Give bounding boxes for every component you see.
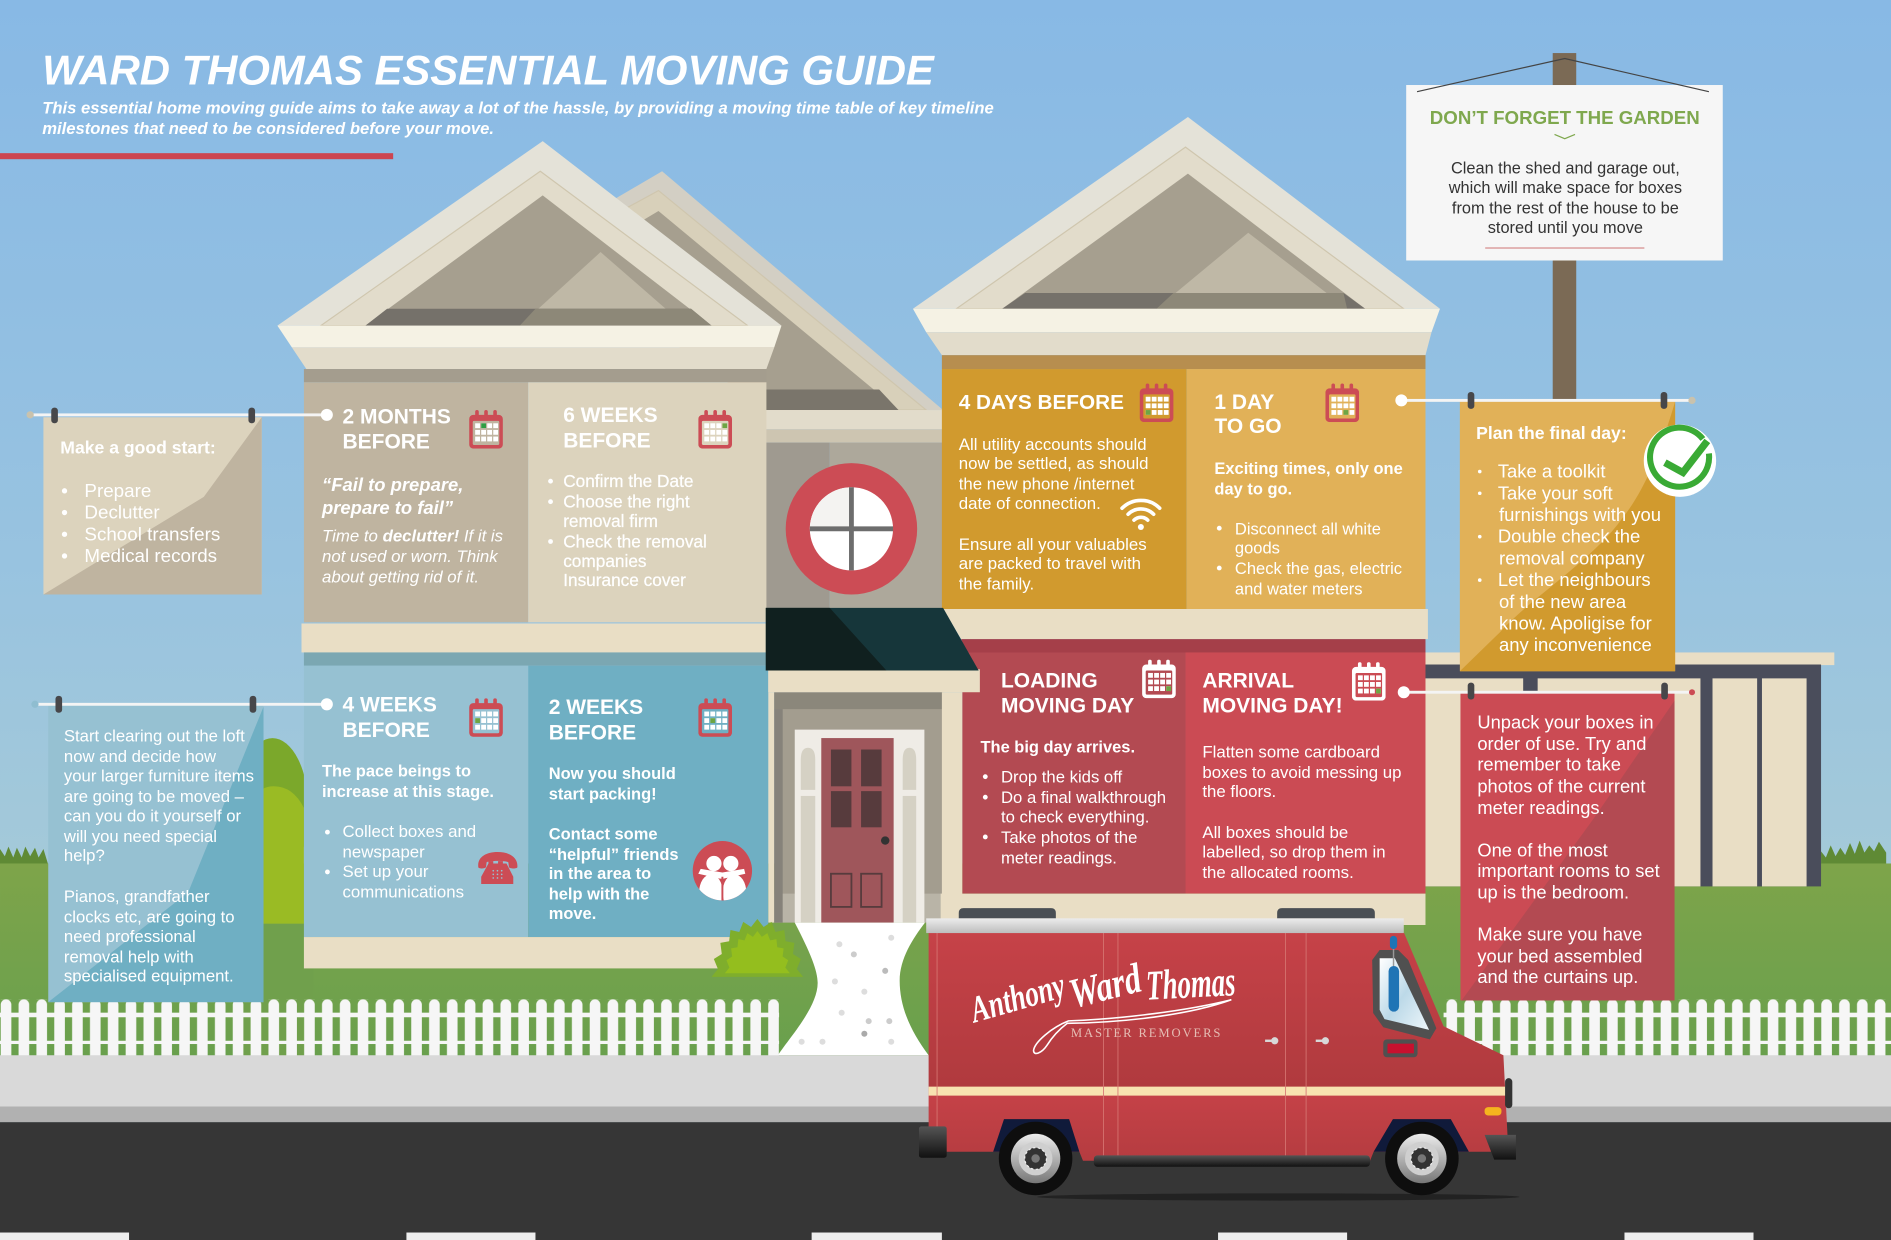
icon: calendar — [1352, 662, 1386, 701]
door handles — [1265, 1037, 1329, 1044]
base plinth right — [941, 894, 1425, 925]
sign text: Clean the shed and garage out, — [1451, 160, 1680, 178]
indicator — [1485, 1107, 1501, 1116]
icon: wifi — [1122, 500, 1160, 530]
text: pianos: Pianos, grandfather — [64, 887, 210, 906]
checklist: loading — [983, 768, 1166, 867]
checklist: loading: Drop the kids off — [1001, 768, 1123, 787]
panel: 2 months before — [304, 382, 528, 622]
text: pianos: removal help with — [64, 947, 194, 966]
icon: round window — [786, 463, 917, 595]
title rule — [0, 153, 393, 159]
icon: calendar — [1142, 660, 1176, 698]
icon: calendar — [469, 698, 503, 737]
door lines — [937, 932, 1306, 1155]
wheel arches — [993, 1119, 1469, 1152]
checklist: final day: of the new area — [1499, 591, 1627, 612]
sign text: from the rest of the house to be — [1452, 199, 1679, 217]
garden sign — [1406, 58, 1723, 260]
checklist: final day: furnishings with you — [1499, 504, 1661, 525]
base plinth left — [304, 937, 768, 968]
sign post — [1553, 53, 1576, 403]
heading: 1 day to go: 1 DAY — [1214, 391, 1274, 414]
bush — [712, 919, 803, 977]
grass tufts — [0, 841, 1886, 865]
sign text: stored until you move — [1488, 219, 1643, 237]
text: furniture: can you do it yourself or — [64, 806, 242, 825]
van window — [1372, 936, 1436, 1039]
text: bed and curtains: your bed assembled — [1477, 945, 1642, 966]
note: make a good start — [27, 408, 333, 595]
checklist: good start: Medical records — [84, 545, 217, 566]
text: unpack: Unpack your boxes in — [1477, 711, 1654, 732]
text: flatten boxes: the floors. — [1202, 782, 1276, 801]
icon: green check — [1644, 425, 1716, 497]
sign heading: DON’T FORGET THE GARDEN — [1430, 107, 1700, 128]
heading: 2 weeks before: BEFORE — [549, 721, 636, 744]
panel: 2 weeks before — [528, 666, 768, 937]
text: furniture: now and decide how — [64, 747, 217, 766]
checklist: 6 weeks: Check the removal — [563, 532, 707, 552]
text: flatten boxes: boxes to avoid messing up — [1202, 763, 1401, 782]
text: declutter advice: about getting rid of it. — [322, 567, 479, 586]
heading: good start: Make a good start: — [60, 437, 216, 457]
text: exciting times: day to go. — [1214, 480, 1292, 498]
heading: 4 weeks before: 4 WEEKS — [343, 694, 437, 717]
blue band — [304, 652, 768, 666]
awning — [766, 608, 979, 671]
road markings — [0, 1233, 1754, 1240]
text: exciting times: Exciting times, only one — [1214, 460, 1403, 478]
text: unpack: meter readings. — [1477, 797, 1605, 818]
body stripe — [929, 1087, 1506, 1096]
checklist: 1 day — [1217, 519, 1402, 599]
clothes line — [31, 696, 333, 713]
note: plan the final day — [1395, 392, 1716, 671]
text: declutter advice: Time to — [322, 526, 383, 545]
heading: 2 months before: BEFORE — [343, 431, 430, 454]
sign rule — [1485, 247, 1644, 249]
van body — [929, 932, 1507, 1161]
road — [0, 1122, 1891, 1240]
right house gable roof — [913, 117, 1440, 369]
front door — [821, 738, 894, 923]
checklist: final day — [1478, 461, 1661, 655]
icon: calendar — [698, 698, 732, 737]
text: furniture: Start clearing out the loft — [64, 727, 245, 746]
text: furniture: will you need special — [63, 827, 217, 846]
rear wheel — [999, 1122, 1072, 1195]
text: start packing: start packing! — [549, 786, 657, 804]
panel: 1 day to go — [1187, 369, 1425, 609]
text: unpack: order of use. Try and — [1477, 733, 1646, 754]
title: WARD THOMAS ESSENTIAL MOVING GUIDE — [42, 46, 935, 93]
logo: Ward — [1064, 955, 1147, 1018]
note: unpack your boxes — [1398, 683, 1695, 1000]
fence — [0, 999, 1891, 1056]
checklist: good start: Declutter — [84, 502, 160, 523]
text: helpful friends: move. — [549, 905, 596, 923]
text: pianos: specialised equipment. — [64, 967, 234, 986]
checklist: final day: removal company — [1499, 547, 1645, 568]
text: helpful friends: “helpful” friends — [549, 846, 679, 864]
checklist: final day: Take a toolkit — [1498, 461, 1605, 482]
heading: arrival moving day: MOVING DAY! — [1202, 695, 1343, 718]
headlight — [1505, 1078, 1512, 1108]
icon: calendar — [1325, 384, 1359, 422]
quote: prepare to fail” — [321, 497, 454, 518]
swoosh — [1034, 1000, 1231, 1053]
subtitle: milestones that need to be considered before your move. — [42, 119, 494, 138]
icon: calendar — [469, 410, 503, 449]
heading: 6 weeks before: 6 WEEKS — [563, 404, 658, 427]
icon: calendar — [698, 410, 732, 449]
checklist: final day: Take your soft — [1498, 482, 1613, 503]
panel: 4 weeks before — [304, 666, 528, 937]
heading: 1 day to go: TO GO — [1214, 415, 1282, 438]
door section — [768, 692, 962, 925]
roof racks — [959, 908, 1375, 918]
van shadow — [1037, 1193, 1520, 1201]
middle beam left — [302, 623, 768, 652]
text: bedroom: One of the most — [1477, 839, 1608, 860]
text: bedroom: up is the bedroom. — [1477, 881, 1629, 902]
checklist: 4 weeks: newspaper — [343, 842, 425, 861]
clothes line — [1398, 683, 1695, 699]
text: pianos: need professional — [64, 927, 196, 946]
checklist: 4 weeks: Collect boxes and — [343, 822, 476, 841]
clothes line — [1395, 392, 1696, 409]
checklist: 6 weeks: Choose the right — [563, 492, 690, 512]
checklist: loading: Take photos of the — [1001, 828, 1137, 847]
heading: 2 months before: 2 MONTHS — [343, 405, 451, 428]
text: valuables: the family. — [959, 575, 1034, 594]
text: pace: increase at this stage. — [322, 783, 494, 801]
garage building at right — [1417, 652, 1834, 886]
checklist: good start: Prepare — [84, 480, 151, 501]
checklist: 1 day: Check the gas, electric — [1235, 559, 1402, 578]
text: valuables: Ensure all your valuables — [959, 535, 1147, 554]
checklist: 1 day: Disconnect all white — [1235, 519, 1381, 538]
icon: friends — [692, 841, 752, 900]
front bumper — [1485, 1135, 1516, 1160]
checklist: 6 weeks — [548, 471, 707, 590]
heading: 4 weeks before: BEFORE — [343, 719, 430, 742]
red band — [961, 639, 1425, 652]
checklist: good start: School transfers — [84, 523, 220, 544]
centre wall with round window — [766, 410, 943, 609]
text: valuables: are packed to travel with — [959, 554, 1141, 573]
lawn — [0, 863, 1891, 1056]
text: bed and curtains: Make sure you have — [1477, 924, 1642, 945]
text: label boxes: labelled, so drop them in — [1202, 842, 1386, 861]
text: helpful friends: Contact some — [549, 825, 658, 843]
side skirt — [1094, 1155, 1370, 1167]
quote: “Fail to prepare, — [322, 474, 463, 495]
text: declutter advice: not used or worn. Think — [322, 547, 499, 566]
text: start packing: Now you should — [549, 765, 676, 783]
text: utility accounts: All utility accounts should — [959, 435, 1147, 454]
background trees — [236, 738, 309, 924]
heading: 4 days before: 4 DAYS BEFORE — [959, 391, 1124, 414]
text: label boxes: All boxes should be — [1202, 823, 1348, 842]
text: bed and curtains: and the curtains up. — [1477, 966, 1638, 987]
text: flatten boxes: Flatten some cardboard — [1202, 742, 1380, 761]
checklist: final day: know. Apoligise for — [1499, 613, 1652, 634]
garden path — [778, 923, 929, 1055]
text: unpack: photos of the current — [1477, 775, 1645, 796]
text: utility accounts: the new phone /internet — [959, 475, 1135, 494]
checklist: 6 weeks: companies — [563, 551, 647, 571]
back house roof — [543, 171, 943, 410]
panel: 4 days before — [942, 369, 1187, 609]
sign text: which will make space for boxes — [1448, 179, 1682, 197]
icon: telephone — [478, 852, 517, 884]
logo: Anthony — [964, 965, 1070, 1032]
text: helpful friends: in the area to — [549, 865, 651, 883]
checklist: final day: any inconvenience — [1499, 634, 1652, 655]
chevron — [1555, 134, 1575, 139]
checklist: loading: meter readings. — [1001, 848, 1117, 867]
marker light — [1383, 1039, 1418, 1057]
checklist: 4 weeks: communications — [343, 882, 464, 901]
icon: calendar — [1140, 384, 1173, 422]
text: helpful friends: help with the — [549, 886, 649, 904]
panel: arrival moving day — [1185, 652, 1425, 894]
text: bedroom: important rooms to set — [1477, 860, 1660, 881]
text: big day: The big day arrives. — [980, 739, 1135, 757]
note: clearing out the loft — [31, 696, 333, 1002]
heading: 6 weeks before: BEFORE — [563, 429, 651, 452]
checklist: 4 weeks: Set up your — [343, 862, 429, 881]
checklist: 6 weeks: removal firm — [563, 511, 658, 531]
heading: arrival moving day: ARRIVAL — [1202, 669, 1294, 692]
door lintel — [768, 669, 980, 692]
text: utility accounts: date of connection. — [959, 494, 1101, 513]
panel: 6 weeks before — [528, 382, 766, 622]
heading: loading moving day: MOVING DAY — [1001, 695, 1134, 718]
text: unpack: remember to take — [1477, 754, 1621, 775]
text: declutter advice: declutter! If it is — [383, 526, 503, 545]
logo: Thomas — [1145, 958, 1237, 1010]
checklist: loading: Do a final walkthrough — [1001, 788, 1166, 807]
text: furniture: are going to be moved – — [64, 787, 245, 806]
checklist: 4 weeks — [325, 822, 476, 901]
text: utility accounts: now be settled, as should — [959, 454, 1149, 473]
checklist: final day: Double check the — [1498, 526, 1640, 547]
text: pianos: clocks etc, are going to — [64, 908, 235, 927]
text: furniture: help? — [64, 846, 105, 865]
checklist: good start — [62, 480, 220, 566]
checklist: 1 day: and water meters — [1235, 580, 1363, 599]
middle beam right — [943, 609, 1428, 639]
kerb — [0, 1106, 1891, 1122]
lawn patch beside the left house — [241, 924, 314, 1056]
text: furniture: your larger furniture items — [64, 766, 254, 785]
logo — [964, 955, 1237, 1053]
checklist: 6 weeks: Confirm the Date — [563, 471, 693, 491]
clothes line — [27, 408, 333, 423]
roof cap — [926, 918, 1404, 933]
text: pace: The pace beings to — [322, 763, 471, 781]
checklist: final day: Let the neighbours — [1498, 569, 1651, 590]
rear bumper — [919, 1126, 947, 1158]
heading: 2 weeks before: 2 WEEKS — [549, 696, 643, 719]
checklist: 1 day: goods — [1235, 539, 1280, 558]
heading: loading moving day: LOADING — [1001, 669, 1098, 692]
panel: loading moving day — [962, 652, 1185, 894]
checklist: loading: to check everything. — [1001, 807, 1149, 826]
tagline: MASTER REMOVERS — [1071, 1026, 1220, 1040]
removal van — [919, 908, 1520, 1201]
pavement — [0, 1055, 1891, 1106]
text: label boxes: the allocated rooms. — [1202, 863, 1354, 882]
heading: final day: Plan the final day: — [1476, 423, 1627, 443]
checklist: 6 weeks: Insurance cover — [563, 570, 686, 590]
subtitle: This essential home moving guide aims to take away a lot of the hassle, by providing a moving time table of key timeline — [42, 98, 994, 117]
left house gable roof — [277, 141, 781, 382]
sign wires — [1417, 58, 1709, 92]
front wheel — [1385, 1122, 1459, 1195]
